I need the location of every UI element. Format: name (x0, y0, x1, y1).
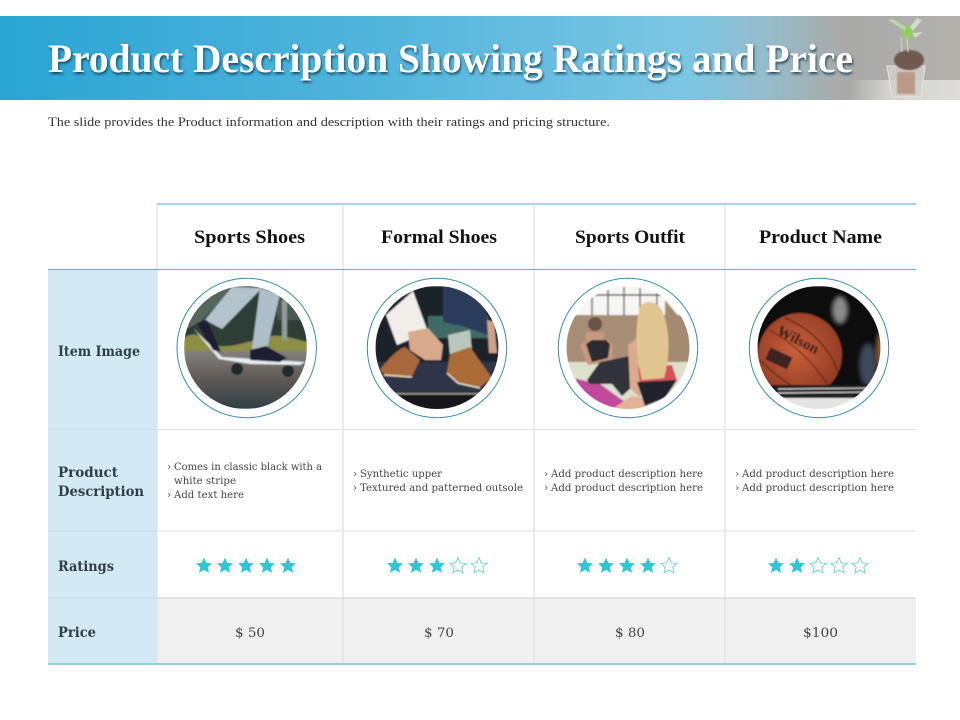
description: formal shoes: › (353, 482, 357, 494)
image: skateboarder (177, 278, 316, 418)
row labels: Item Image (58, 344, 140, 360)
description: formal shoes: Synthetic upper (360, 468, 443, 480)
description: sports outfit: Add product description here (550, 468, 703, 480)
description: product name (735, 468, 894, 494)
image: basketball: Wilson (774, 323, 822, 358)
description: sports outfit: › (544, 482, 548, 494)
column headings: Sports Outfit (575, 227, 686, 248)
column headings (194, 227, 882, 248)
row label column background (48, 269, 157, 664)
prices: $ 50 (235, 626, 265, 641)
prices: $ 80 (615, 626, 645, 641)
image: basketball (749, 278, 889, 418)
description: product name: Add product description here (741, 482, 894, 494)
description: sports shoes: Add text here (173, 489, 244, 501)
product comparison table (48, 204, 916, 664)
column headings: Product Name (759, 227, 882, 248)
subtitle text: The slide provides the Product information and description with their ratings and pricing structure. (48, 114, 610, 129)
row labels: Price (58, 625, 96, 641)
row labels: Ratings (58, 559, 114, 575)
image: formal shoes (367, 278, 507, 418)
description: sports outfit (544, 468, 703, 494)
description: sports outfit: › (544, 468, 548, 480)
prices: $ 70 (424, 626, 454, 641)
description: sports shoes (167, 461, 322, 501)
description: sports shoes: › (167, 461, 171, 473)
title banner (0, 16, 960, 100)
icon: plant growing from glass of coins (850, 18, 960, 100)
description: sports outfit: Add product description here (550, 482, 703, 494)
title text: Product Description Showing Ratings and Price (48, 36, 853, 81)
description: product name: Add product description here (741, 468, 894, 480)
image: sports outfit (558, 278, 698, 418)
ratings: 2 of 5 stars (768, 558, 868, 573)
description: product name: › (735, 482, 739, 494)
prices: $100 (803, 626, 838, 641)
description: sports shoes: › (167, 489, 171, 501)
grid lines (48, 204, 916, 664)
ratings: 4 of 5 stars (577, 558, 677, 573)
column headings: Sports Shoes (194, 227, 305, 248)
ratings: 3 of 5 stars (387, 558, 487, 573)
description: sports shoes: white stripe (174, 475, 236, 487)
description: formal shoes: › (353, 468, 357, 480)
description: sports shoes: Comes in classic black with a (174, 461, 322, 473)
prices (235, 626, 838, 641)
price row background (157, 598, 916, 664)
description: formal shoes (353, 468, 523, 494)
ratings: 5 of 5 stars (196, 558, 296, 573)
description: product name: › (735, 468, 739, 480)
row labels: Product (58, 465, 119, 481)
row labels: Description (58, 484, 144, 500)
row labels (58, 344, 144, 641)
column headings: Formal Shoes (381, 227, 497, 248)
description: formal shoes: Textured and patterned outsole (360, 482, 523, 494)
